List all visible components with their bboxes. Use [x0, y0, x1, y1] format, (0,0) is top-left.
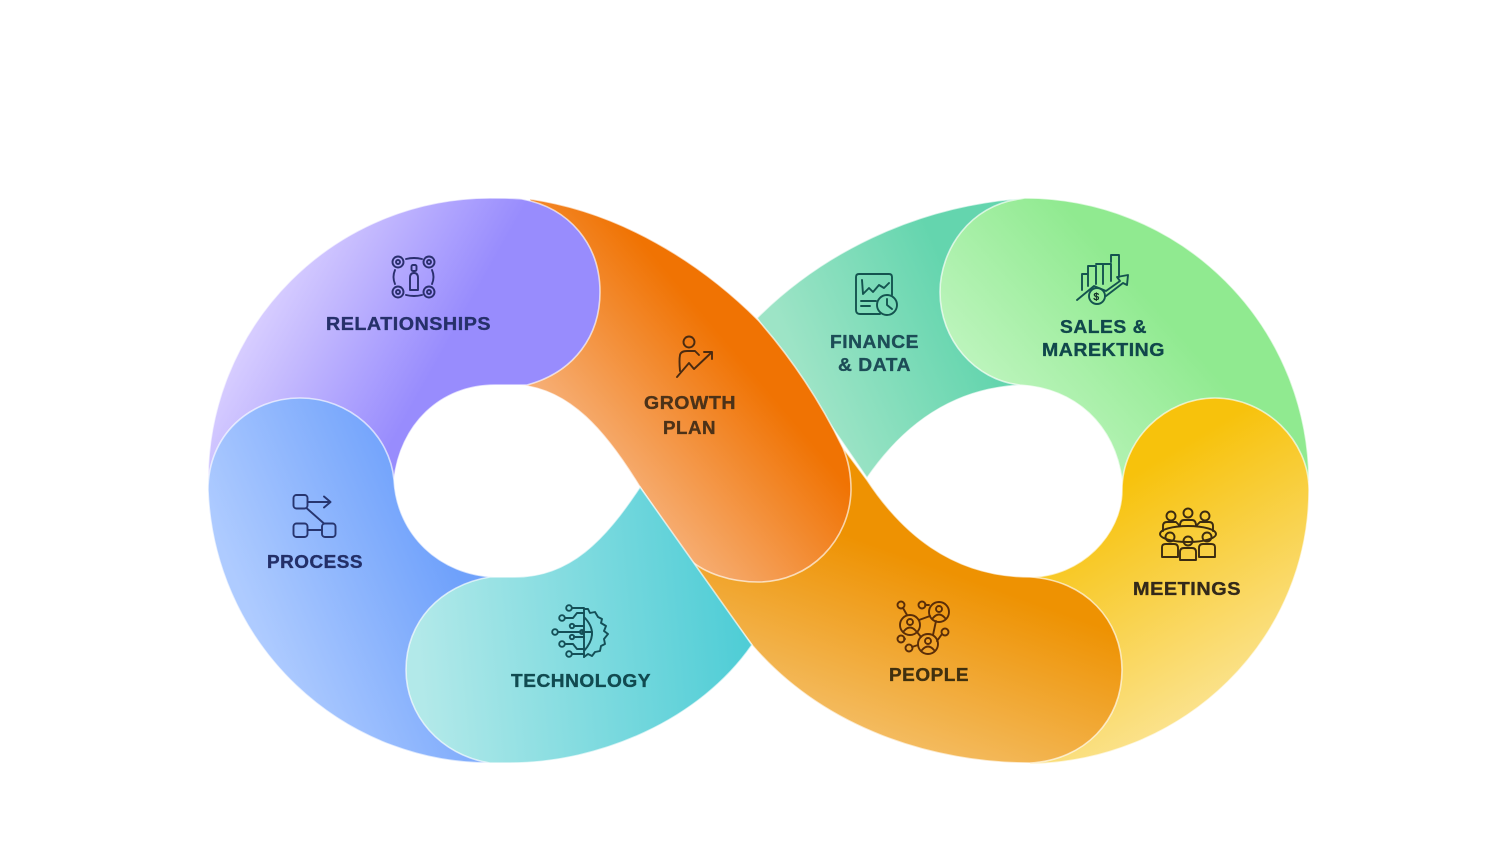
- label: growth plan: [644, 393, 736, 438]
- panel: growth plan: [520, 199, 851, 582]
- icon: person with rising arrow: [677, 336, 712, 377]
- relationships band: [208, 198, 600, 480]
- label: relationships: RELATIONSHIPS: [326, 314, 491, 334]
- process band: [208, 398, 495, 763]
- label: sales and marketing: MAREKTING: [1042, 340, 1165, 360]
- sales band: [940, 198, 1309, 481]
- panel: technology: [406, 487, 752, 763]
- icon: people network: [898, 602, 949, 654]
- label: meetings: MEETINGS: [1133, 579, 1241, 599]
- technology band: [406, 487, 752, 763]
- label: technology: TECHNOLOGY: [511, 671, 651, 691]
- icon: gear circuit: [552, 605, 608, 657]
- label: finance and data: [830, 332, 919, 375]
- label: finance and data: & DATA: [838, 355, 911, 375]
- panel: meetings: [1030, 398, 1309, 764]
- panel: finance and data: [757, 198, 1030, 478]
- label: people: PEOPLE: [889, 665, 969, 685]
- label: process: PROCESS: [267, 552, 363, 572]
- panel: relationships: [208, 198, 600, 480]
- icon: bar chart with coin: [1077, 255, 1128, 304]
- label: sales and marketing: SALES &: [1060, 317, 1147, 337]
- panel: process: [208, 398, 495, 763]
- icon: report with clock: [856, 274, 897, 315]
- icon: bar chart with coin: $: [1094, 292, 1100, 303]
- panel: sales and marketing: [940, 198, 1309, 481]
- meetings band: [1030, 398, 1309, 764]
- people band: [690, 437, 1122, 763]
- icon: meeting table: [1160, 508, 1216, 560]
- label: growth plan: GROWTH: [644, 393, 736, 413]
- panel: people: [690, 437, 1122, 763]
- label: growth plan: PLAN: [663, 418, 716, 438]
- finance band: [757, 198, 1030, 478]
- icon: process flow: [294, 495, 336, 537]
- icon: person with connected contacts: [392, 256, 434, 298]
- label: finance and data: FINANCE: [830, 332, 919, 352]
- growth band: [520, 199, 851, 582]
- label: sales and marketing: [1042, 317, 1165, 360]
